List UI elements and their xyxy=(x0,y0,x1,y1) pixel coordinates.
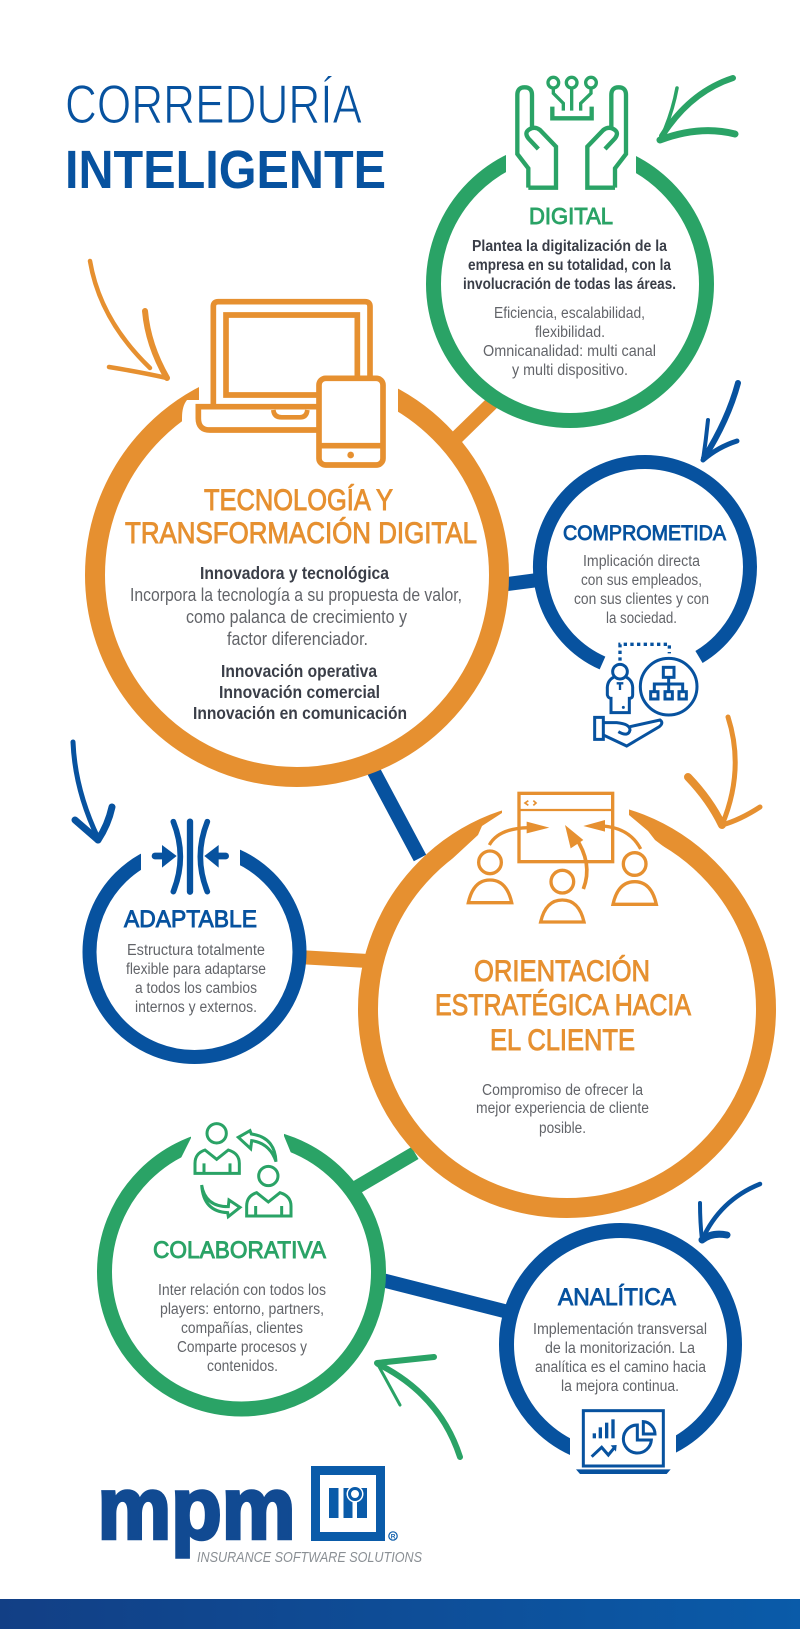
text: comprometida: la sociedad. xyxy=(606,610,677,627)
text: innovadora y tecnologica xyxy=(130,563,462,649)
icon: window and three users xyxy=(468,793,656,922)
heading: orientacion xyxy=(435,955,691,1057)
heading: adaptable: ADAPTABLE xyxy=(124,906,257,933)
connector: technology to orientation xyxy=(372,768,420,858)
connector: technology to comprometida xyxy=(500,580,538,585)
text: digital details: flexibilidad. xyxy=(535,324,605,341)
title: INTELIGENTE xyxy=(65,140,386,200)
panel: orientacion estrategica hacia el cliente xyxy=(368,780,766,1208)
text: colaborativa: Inter relación con todos los xyxy=(158,1282,326,1299)
arrow: green top right xyxy=(660,78,735,140)
text: analitica xyxy=(533,1321,707,1395)
icon: laptop and tablet xyxy=(198,302,383,465)
logo: mpm: mpm xyxy=(98,1458,296,1558)
heading: tecnologia: TRANSFORMACIÓN DIGITAL xyxy=(125,517,477,550)
panel: comprometida xyxy=(540,462,750,746)
text: adaptable: a todos los cambios xyxy=(135,980,257,997)
text: colaborativa: players: entorno, partners, xyxy=(160,1301,324,1318)
icon: laptop with charts xyxy=(576,1411,671,1474)
heading: comprometida: COMPROMETIDA xyxy=(563,522,726,545)
heading: digital: DIGITAL xyxy=(529,203,613,229)
footer bar xyxy=(0,1599,800,1629)
text: orientacion: Compromiso de ofrecer la xyxy=(482,1082,643,1099)
text: digital details: y multi dispositivo. xyxy=(512,362,628,379)
text: analitica: Implementación transversal xyxy=(533,1321,707,1338)
text: comprometida: con sus empleados, xyxy=(581,572,702,589)
text: comprometida: con sus clientes y con xyxy=(574,591,709,608)
title xyxy=(65,73,386,200)
text: innovation list xyxy=(193,661,407,723)
text: digital lead: Plantea la digitalización de la xyxy=(472,238,667,255)
text: digital details: Eficiencia, escalabilidad, xyxy=(494,305,645,322)
text: analitica: analítica es el camino hacia xyxy=(535,1359,706,1376)
text: analitica: de la monitorización. La xyxy=(545,1340,695,1357)
text: innovadora y tecnologica: Incorpora la tecnología a su propuesta de valor, xyxy=(130,585,462,605)
panel: colaborativa xyxy=(104,1120,378,1409)
heading: tecnologia: TECNOLOGÍA Y xyxy=(204,484,393,517)
arrow: blue to adaptable xyxy=(73,742,112,840)
text: digital lead xyxy=(463,238,676,293)
arrow: orange top left xyxy=(90,261,167,378)
heading: orientacion: ORIENTACIÓN xyxy=(474,955,650,988)
icon: two people exchanging xyxy=(195,1124,291,1217)
heading: orientacion: ESTRATÉGICA HACIA xyxy=(435,989,691,1022)
connector: adaptable to orientation xyxy=(298,957,368,961)
text: adaptable xyxy=(126,942,266,1016)
text: comprometida: Implicación directa xyxy=(583,553,700,570)
title: CORREDURÍA xyxy=(65,73,362,135)
text: innovadora y tecnologica: Innovadora y tecnológica xyxy=(200,563,389,583)
text: digital lead: involucración de todas las áreas. xyxy=(463,276,676,293)
panel: tecnologia y transformacion digital xyxy=(95,302,499,777)
heading: colaborativa: COLABORATIVA xyxy=(153,1237,326,1264)
heading: orientacion: EL CLIENTE xyxy=(490,1024,635,1057)
logo: mpm: R xyxy=(391,1534,396,1540)
text: orientacion: mejor experiencia de cliente xyxy=(476,1100,649,1117)
arrow: orange to orientation xyxy=(688,717,760,825)
text: innovation list: Innovación operativa xyxy=(221,661,377,681)
text: adaptable: internos y externos. xyxy=(135,999,257,1016)
text: colaborativa: Comparte procesos y xyxy=(177,1339,307,1356)
logo: mpm xyxy=(98,1458,422,1566)
icon: hands with circuit xyxy=(517,77,626,188)
panel: adaptable xyxy=(90,822,300,1057)
arrow: blue to analitica xyxy=(700,1184,760,1240)
heading: tecnologia xyxy=(125,484,477,550)
text: innovation list: Innovación comercial xyxy=(219,682,380,702)
logo: mpm: INSURANCE SOFTWARE SOLUTIONS xyxy=(197,1549,422,1566)
text: colaborativa: compañías, clientes xyxy=(181,1320,303,1337)
text: colaborativa: contenidos. xyxy=(207,1358,278,1375)
arrow: blue to comprometida xyxy=(703,383,738,460)
text: analitica: la mejora continua. xyxy=(561,1378,679,1395)
connector: orientation to colaborativa xyxy=(352,1153,415,1190)
text: digital details xyxy=(483,305,656,379)
icon: compression arrows xyxy=(155,822,226,892)
text: colaborativa xyxy=(158,1282,326,1375)
text: orientacion: posible. xyxy=(539,1120,586,1137)
text: digital lead: empresa en su totalidad, con la xyxy=(468,257,671,274)
heading: analitica: ANALÍTICA xyxy=(558,1284,677,1311)
connector: digital to technology xyxy=(452,403,492,442)
text: innovadora y tecnologica: como palanca de crecimiento y xyxy=(186,607,407,627)
panel: digital xyxy=(434,77,706,420)
icon: employee, org chart and hand xyxy=(595,644,697,746)
text: innovation list: Innovación en comunicación xyxy=(193,703,407,723)
text: innovadora y tecnologica: factor diferenciador. xyxy=(227,629,368,649)
text: adaptable: Estructura totalmente xyxy=(127,942,265,959)
text: digital details: Omnicanalidad: multi canal xyxy=(483,343,656,360)
panel: analitica xyxy=(506,1230,734,1475)
text: adaptable: flexible para adaptarse xyxy=(126,961,266,978)
connector: colaborativa to analitica xyxy=(378,1279,508,1312)
text: comprometida xyxy=(574,553,709,627)
arrow: green to colaborativa xyxy=(377,1357,460,1457)
text: orientacion xyxy=(476,1082,649,1137)
